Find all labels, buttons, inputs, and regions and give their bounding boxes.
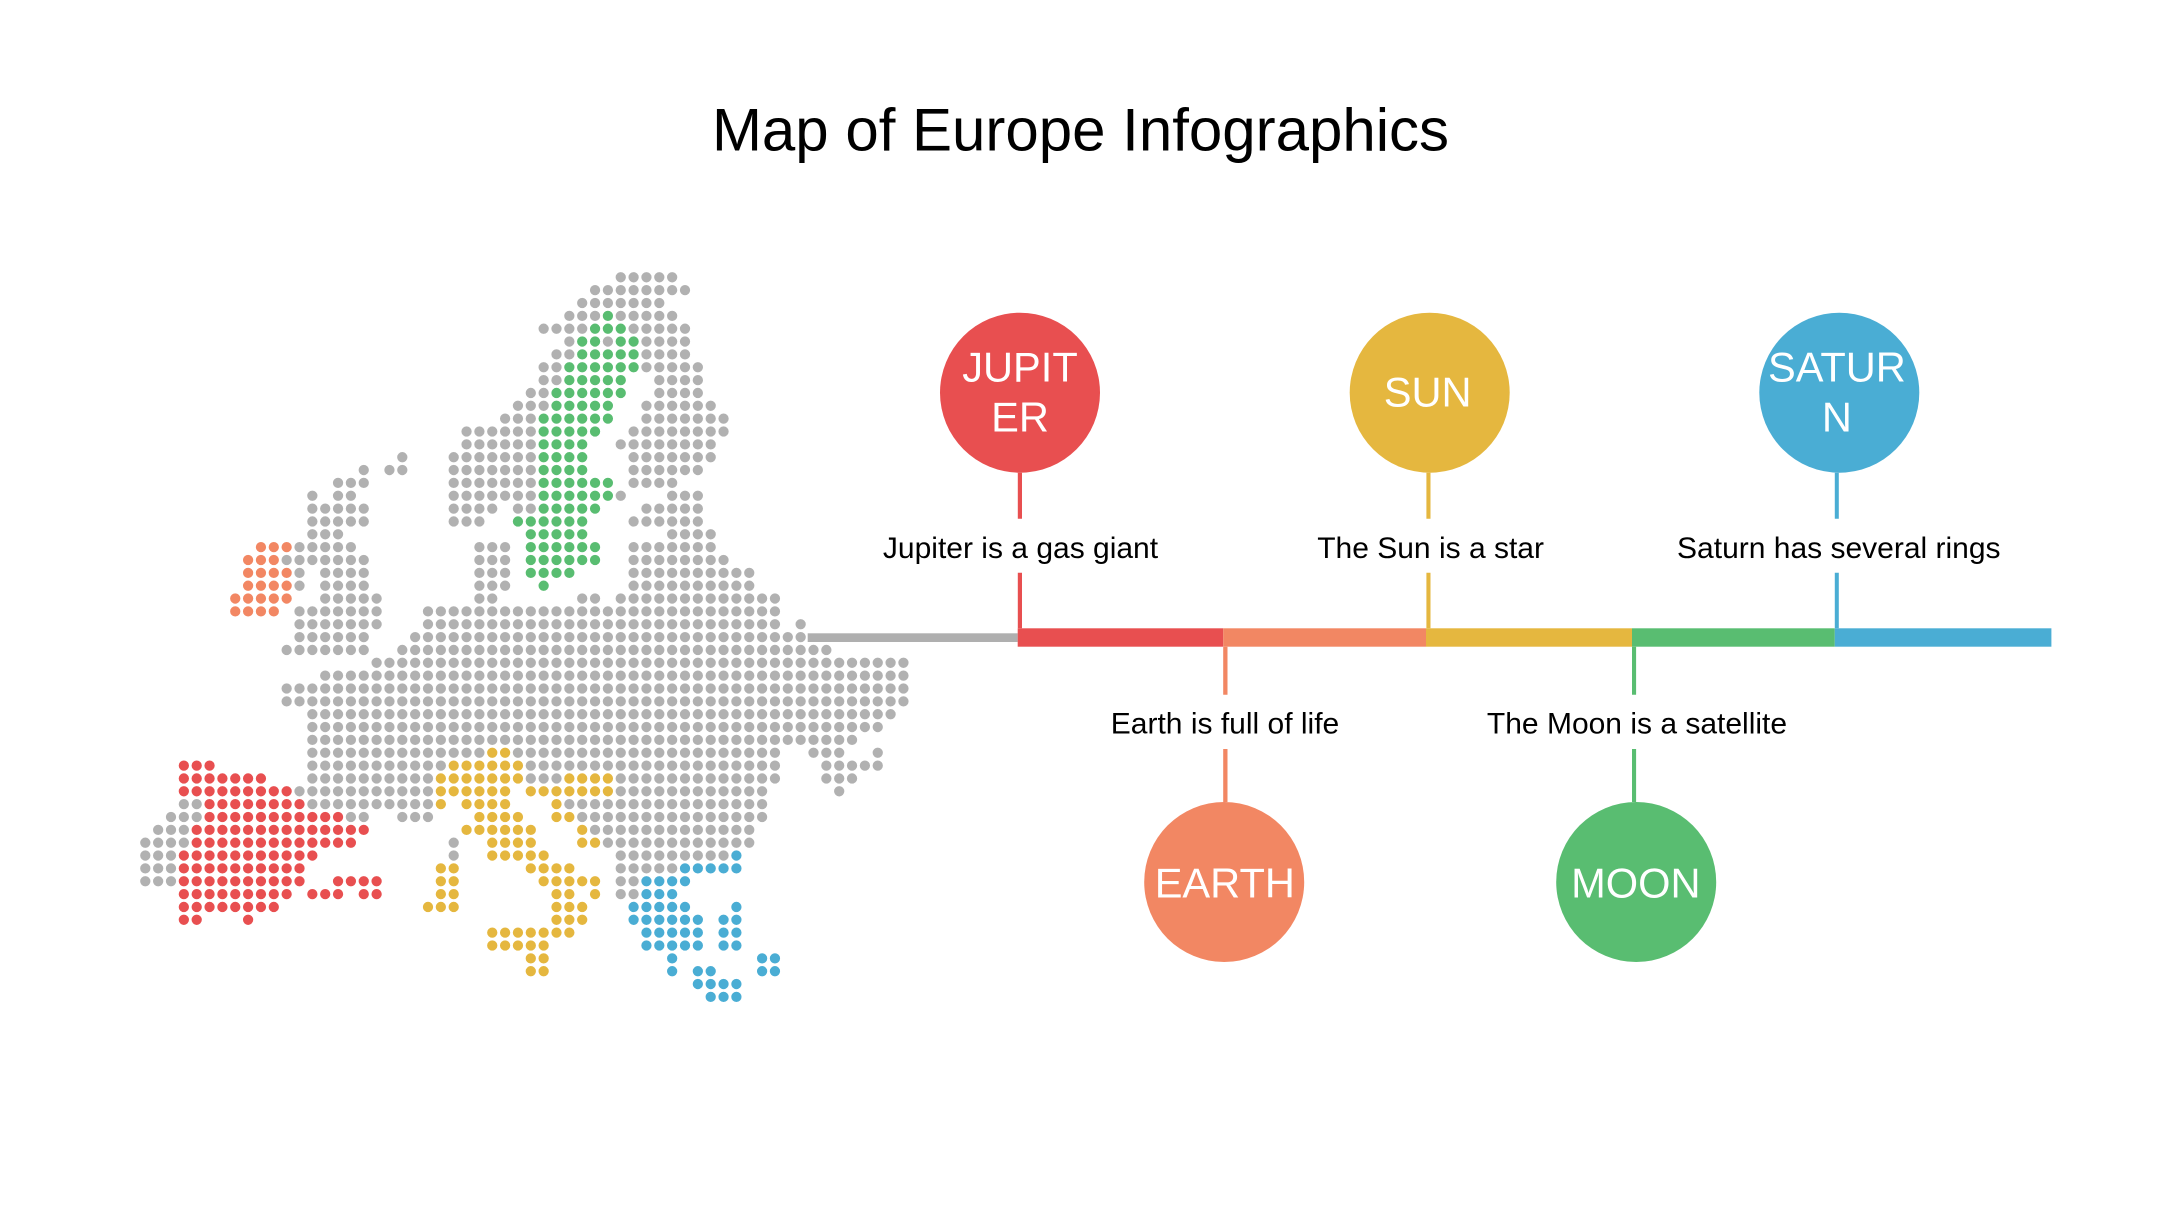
Jupiter stem <box>1018 473 1022 628</box>
Jupiter name: ER <box>991 394 1049 441</box>
orange segment <box>1223 628 1426 647</box>
milestone: Moon <box>1487 647 1787 962</box>
yellow segment <box>1426 628 1632 647</box>
Jupiter description: Jupiter is a gas giant <box>883 532 1159 565</box>
dot map of Europe <box>145 277 904 997</box>
Earth description: Earth is full of life <box>1111 708 1339 741</box>
Saturn name: SATUR <box>1768 343 1906 390</box>
Earth circle <box>1144 802 1304 962</box>
milestone: Jupiter <box>883 313 1159 628</box>
Saturn circle <box>1759 313 1919 473</box>
Sun description: The Sun is a star <box>1317 532 1544 565</box>
Saturn name: N <box>1822 394 1852 441</box>
Saturn stem <box>1835 473 1839 628</box>
Saturn description: Saturn has several rings <box>1677 532 2001 565</box>
Sun stem <box>1426 473 1430 628</box>
map dots: red region <box>184 766 377 920</box>
Moon stem <box>1632 647 1636 802</box>
grey connector from map <box>808 633 1018 642</box>
title: Map of Europe Infographics <box>712 97 1449 164</box>
map dots: green region <box>518 316 634 586</box>
green segment <box>1632 628 1835 647</box>
Jupiter circle <box>940 313 1100 473</box>
map dots: orange region <box>235 547 287 611</box>
map dots: blue region <box>634 856 775 997</box>
Moon name: MOON <box>1571 859 1701 906</box>
map dots: yellow region <box>428 753 608 971</box>
Sun circle <box>1350 313 1510 473</box>
Moon description: The Moon is a satellite <box>1487 708 1787 741</box>
Earth stem <box>1223 647 1228 802</box>
milestone: Earth <box>1111 647 1339 962</box>
timeline bar <box>808 628 2051 647</box>
Earth name: EARTH <box>1155 859 1295 906</box>
Sun name: SUN <box>1384 369 1472 416</box>
blue segment <box>1835 628 2051 647</box>
Moon circle <box>1556 802 1716 962</box>
map dots: grey countries <box>145 277 904 894</box>
Jupiter name: JUPIT <box>962 343 1078 390</box>
red segment <box>1018 628 1223 647</box>
milestone: Sun <box>1317 313 1544 628</box>
milestone: Saturn <box>1677 313 2001 628</box>
